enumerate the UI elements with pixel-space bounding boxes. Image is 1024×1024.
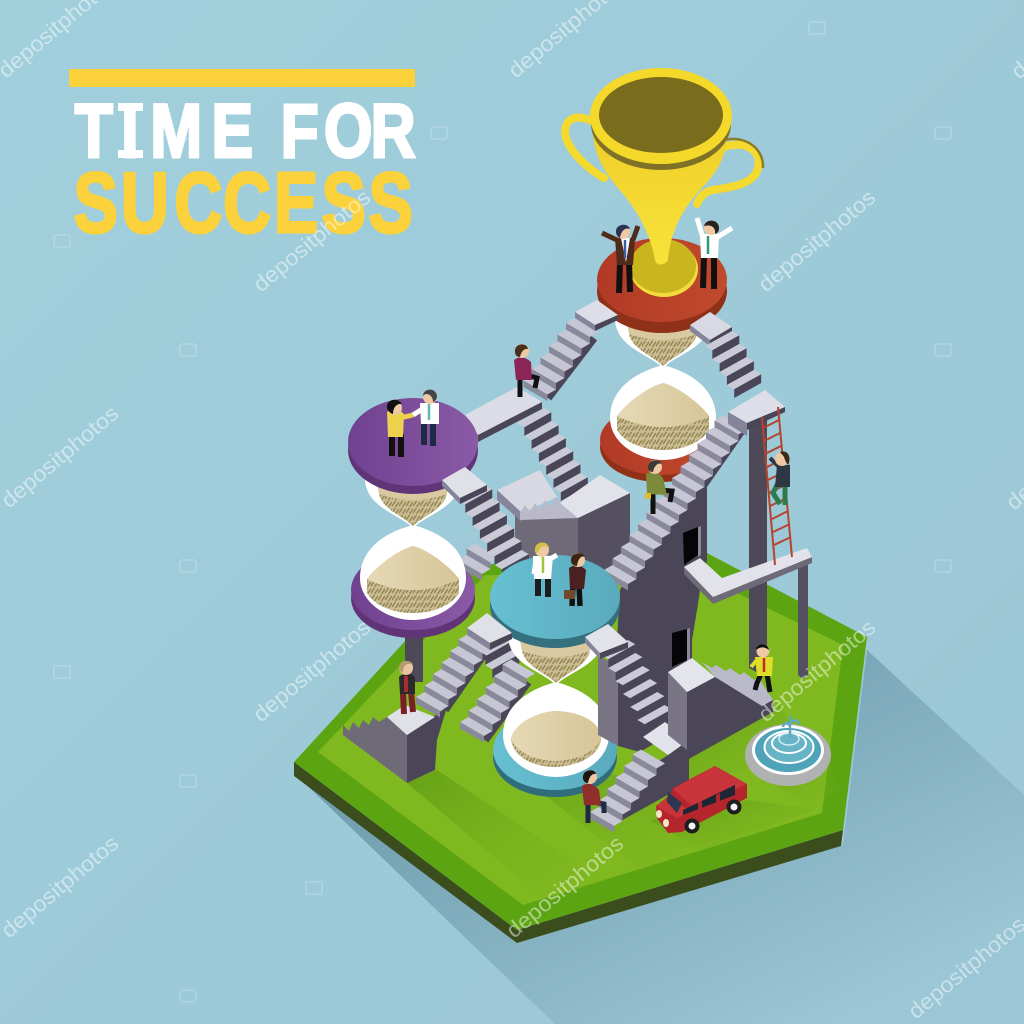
- teal left landing: [467, 613, 512, 643]
- walkway: [465, 387, 542, 435]
- water spout: [783, 716, 799, 738]
- purple base disc: [351, 558, 475, 638]
- right stairs from red disc: [690, 312, 761, 398]
- tower: [617, 430, 747, 752]
- cup body: [593, 135, 727, 264]
- title block: [69, 69, 416, 251]
- left handle: [565, 118, 604, 178]
- person: yellow shirt handshake: [387, 400, 413, 457]
- purple glass and sand: [360, 480, 466, 620]
- person: blond in black jacket: [399, 661, 415, 714]
- purple hourglass: [348, 398, 499, 682]
- fountain: [745, 716, 831, 786]
- trophy: [565, 68, 763, 297]
- red glass and sand: [610, 320, 716, 460]
- briefcase: [564, 590, 575, 599]
- red hourglass: [597, 238, 727, 482]
- red car: [656, 766, 747, 834]
- small back stair: [458, 555, 490, 580]
- slab serifs on letter I: [118, 103, 143, 158]
- right handle: [697, 145, 759, 204]
- teal glass and sand: [503, 637, 609, 777]
- person: red shirt climbing: [582, 770, 604, 823]
- person: maroon climbing: [514, 344, 537, 397]
- title line: success: SUCCESS: [74, 156, 413, 251]
- person: on ladder: [770, 451, 790, 505]
- hexagonal grass island: [294, 553, 867, 943]
- upper right landing: [690, 312, 732, 340]
- watermark: depositphotos: [248, 184, 375, 297]
- watermark: depositphotos: [248, 614, 375, 727]
- person: businessman with briefcase: [564, 553, 586, 606]
- ladder landing: [728, 390, 785, 423]
- top left walkway and stairs: [465, 300, 618, 501]
- ladder: [762, 407, 792, 565]
- long shadow of island: [296, 650, 1024, 1024]
- central block: [497, 470, 630, 575]
- teal top disc: [490, 564, 620, 648]
- wheels: [684, 818, 700, 834]
- trophy base: [630, 241, 698, 297]
- lower block and stair: [590, 722, 689, 832]
- middle stair under walkway: [517, 408, 551, 436]
- red base disc: [600, 412, 720, 482]
- L-shaped platform: [684, 548, 812, 604]
- lower left stairs: [460, 637, 535, 742]
- right block with descending stair: [668, 658, 773, 760]
- title line: time for: TIME FOR: [75, 88, 416, 173]
- purple pillar: [405, 630, 423, 682]
- watermark: depositphotos: [753, 614, 880, 727]
- upper door: [683, 527, 698, 565]
- upper left landing: [575, 300, 618, 325]
- person: white shirt handshake: [413, 390, 439, 446]
- person: blond talking: [533, 542, 557, 597]
- watermark: depositphotos: [501, 830, 628, 943]
- stair from purple disc: [442, 467, 529, 578]
- tall column: [749, 412, 767, 673]
- watermark: depositphotos: [753, 184, 880, 297]
- teal right landing: [585, 624, 628, 653]
- person: cheering left: [602, 225, 638, 293]
- headlights: [656, 810, 662, 818]
- right-of-teal column and stair: [585, 624, 672, 752]
- thin column: [798, 556, 808, 679]
- teal base disc: [493, 717, 617, 797]
- cup interior: [599, 77, 723, 153]
- cup rim: [590, 68, 732, 164]
- title accent bar: [69, 69, 415, 87]
- person: cheering right: [697, 218, 732, 289]
- red top disc: [597, 249, 727, 333]
- lower door: [672, 629, 687, 667]
- olive band: [591, 78, 731, 170]
- purple top disc: [348, 406, 478, 494]
- purple landing: [442, 467, 487, 498]
- person: olive walker: [645, 460, 672, 514]
- watermark: depositphotos: [903, 911, 1024, 1024]
- person: yellow shirt on stair: [751, 644, 773, 692]
- left block and stair: [343, 613, 512, 783]
- teal hourglass: [490, 555, 620, 797]
- long stair to ladder landing: [604, 390, 785, 590]
